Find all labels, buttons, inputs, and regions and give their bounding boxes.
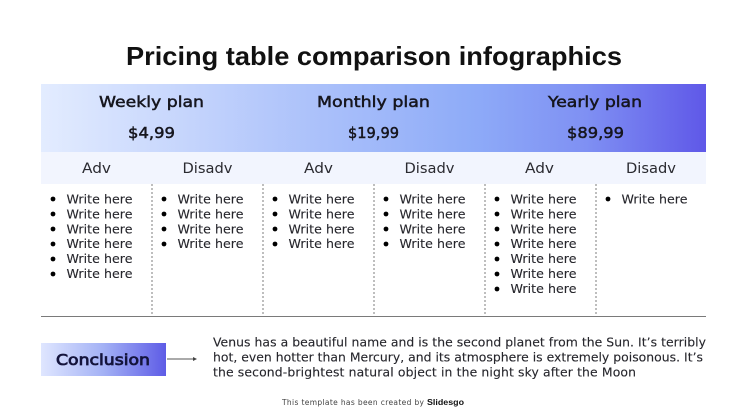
- list: monthly disadv: Write here: [400, 221, 466, 236]
- panel: adv/disadv row: Disadv: [182, 160, 233, 177]
- heading: monthly plan: Monthly plan: [317, 93, 430, 111]
- list: yearly adv: Write here: [510, 236, 577, 251]
- list: yearly adv: Write here: [510, 266, 577, 281]
- heading: weekly plan: [99, 93, 204, 142]
- list: yearly adv: Write here: [510, 192, 577, 206]
- text block: conclusion body: hot, even hotter than Mercury, and its atmosphere is extremely poisonous. It’s: [213, 350, 703, 364]
- panel: plan header band: [41, 84, 706, 152]
- panel: adv/disadv row: Adv: [82, 160, 111, 177]
- list: weekly adv: Write here: [66, 236, 133, 251]
- footer credit: This template has been created by: [281, 398, 425, 407]
- panel: adv/disadv row: Adv: [525, 160, 554, 177]
- heading: monthly plan: $19,99: [348, 124, 399, 142]
- list: weekly disadv: Write here: [178, 206, 244, 221]
- arrow: [167, 357, 197, 361]
- footer credit: Slidesgo: [427, 398, 464, 407]
- list: weekly adv: [51, 192, 133, 281]
- list: monthly disadv: Write here: [400, 206, 466, 221]
- list: weekly disadv: Write here: [178, 192, 244, 206]
- panel: adv/disadv row: Disadv: [626, 160, 676, 177]
- text block: conclusion body: Venus has a beautiful name and is the second planet from the Sun. It’s terribly: [213, 334, 706, 350]
- list: weekly disadv: Write here: [178, 236, 244, 251]
- list: monthly adv: Write here: [288, 206, 355, 221]
- list: yearly adv: Write here: [510, 251, 577, 266]
- panel: adv/disadv row: Adv: [304, 160, 333, 177]
- title: Pricing table comparison infographics: [126, 41, 622, 71]
- list: yearly adv: Write here: [510, 206, 577, 221]
- list: weekly disadv: [162, 192, 244, 251]
- panel: conclusion label: [41, 343, 166, 376]
- list: yearly adv: [495, 192, 577, 296]
- list: monthly adv: Write here: [288, 221, 355, 236]
- heading: yearly plan: [547, 93, 642, 142]
- list: weekly adv: Write here: [66, 251, 133, 266]
- list: yearly adv: Write here: [510, 281, 577, 296]
- list: monthly adv: Write here: [288, 192, 355, 206]
- list: weekly disadv: Write here: [178, 221, 244, 236]
- list: monthly disadv: Write here: [400, 236, 466, 251]
- text block: conclusion body: [213, 334, 706, 380]
- heading: monthly plan: [317, 93, 430, 142]
- list: yearly adv: Write here: [510, 221, 577, 236]
- list: weekly adv: Write here: [66, 206, 133, 221]
- list: monthly disadv: Write here: [400, 192, 466, 206]
- heading: yearly plan: Yearly plan: [547, 93, 642, 111]
- list: monthly disadv: [384, 192, 466, 251]
- text block: conclusion body: the second-brightest natural object in the night sky after the Moon: [213, 364, 636, 380]
- list: weekly adv: Write here: [66, 266, 133, 281]
- list: monthly adv: Write here: [288, 236, 355, 251]
- heading: weekly plan: Weekly plan: [99, 93, 204, 111]
- list: yearly disadv: Write here: [622, 192, 688, 206]
- heading: weekly plan: $4,99: [128, 124, 175, 142]
- panel: conclusion label: Conclusion: [56, 351, 150, 369]
- panel: adv/disadv row: [41, 152, 706, 184]
- panel: adv/disadv row: Disadv: [404, 160, 455, 177]
- list: monthly adv: [273, 192, 355, 251]
- heading: yearly plan: $89,99: [567, 124, 624, 142]
- list: weekly adv: Write here: [66, 192, 133, 206]
- list: weekly adv: Write here: [66, 221, 133, 236]
